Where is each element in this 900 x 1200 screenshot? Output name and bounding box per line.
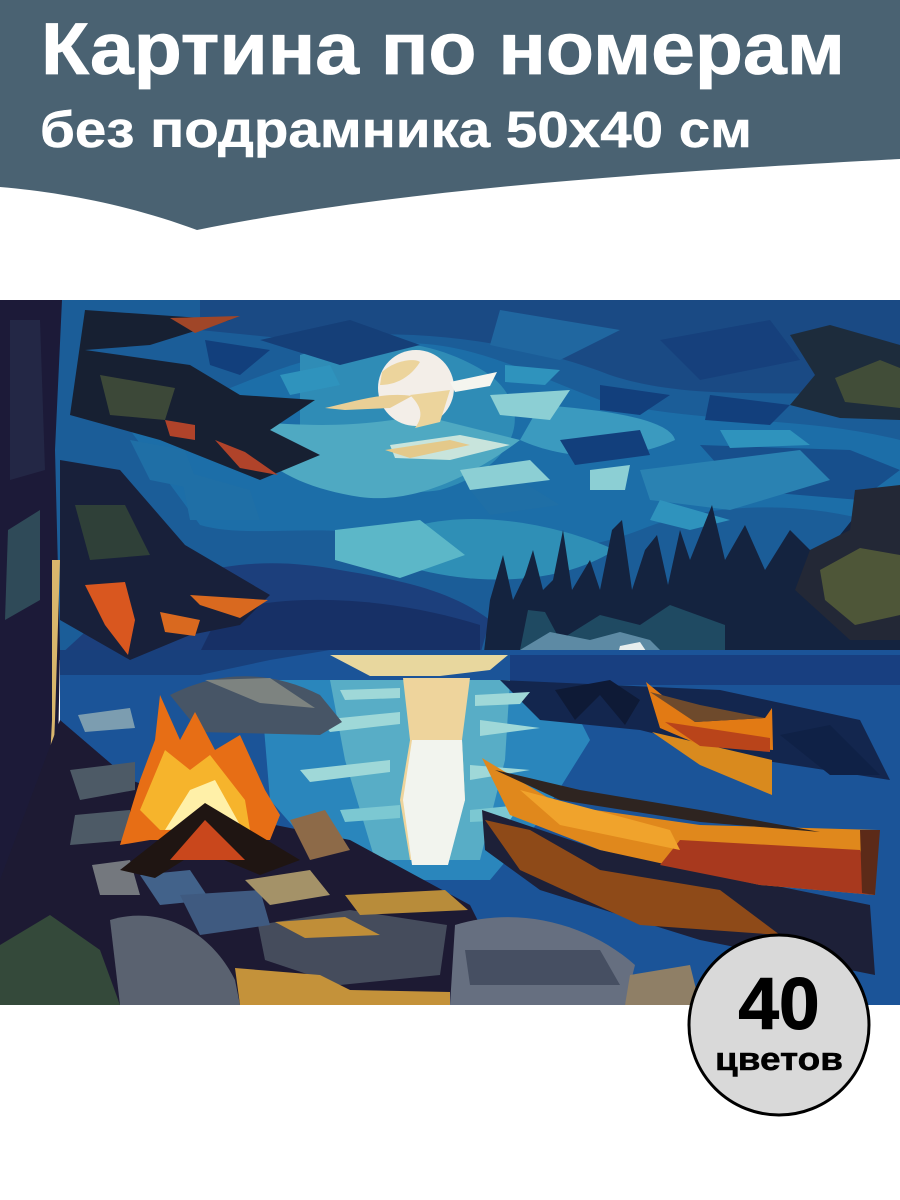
badge caption: цветов — [715, 1041, 843, 1077]
far canoe reflection — [652, 732, 772, 795]
header banner — [0, 0, 900, 230]
lake — [60, 650, 900, 1010]
sky — [0, 300, 900, 660]
rock behind fire — [78, 676, 342, 735]
tree line — [484, 505, 900, 655]
title: Картина по номерам — [41, 9, 845, 90]
dark left tree trunk — [0, 300, 62, 930]
foreground rocks — [70, 762, 700, 1005]
foreground shore — [0, 720, 520, 1005]
far canoe — [646, 682, 773, 752]
distant hills — [60, 563, 490, 655]
campfire — [120, 695, 350, 878]
near canoe reflection — [482, 810, 875, 975]
left branches with orange needles — [60, 310, 320, 660]
subtitle: без подрамника 50х40 см — [40, 101, 752, 158]
colour count badge — [689, 935, 869, 1115]
painting: moonlit lake with campfire and canoes — [0, 300, 900, 1010]
right foliage — [790, 325, 900, 640]
moon — [325, 350, 497, 428]
badge number: 40 — [738, 964, 820, 1045]
near canoe — [482, 758, 880, 895]
